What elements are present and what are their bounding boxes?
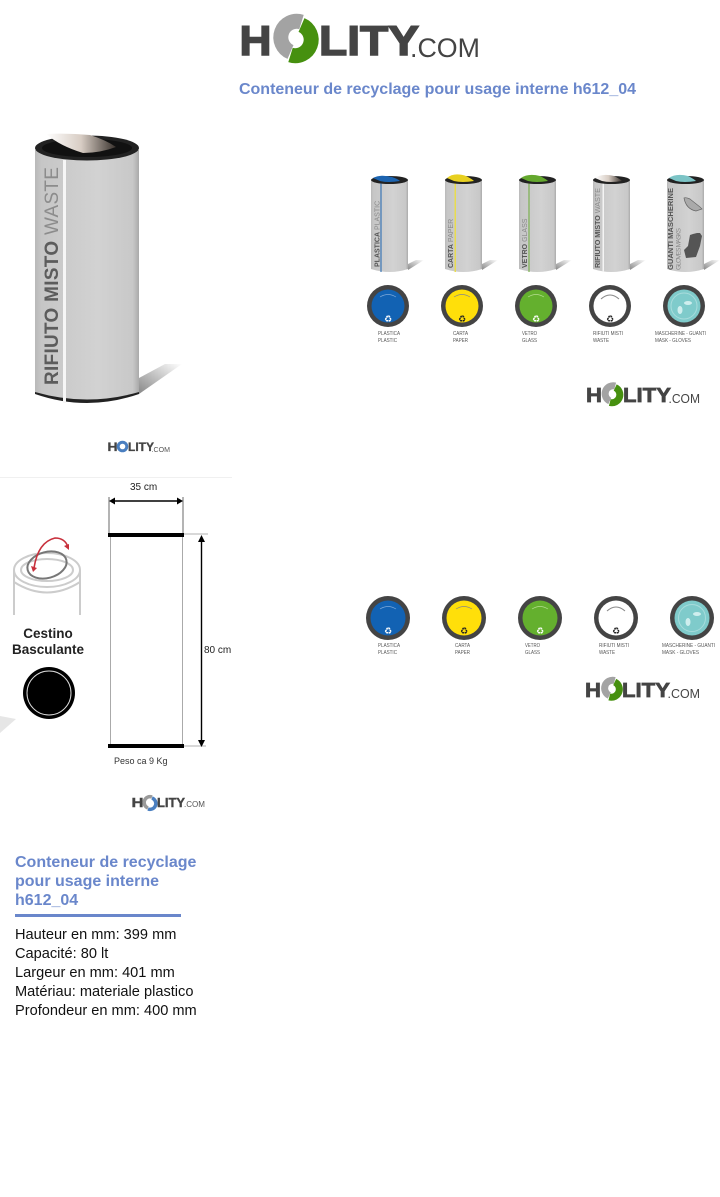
logo: right top: .COM (668, 391, 700, 406)
text block: specifications: Hauteur en mm: 399 mm (15, 927, 176, 943)
panel: five coloured bins (371, 174, 720, 272)
text block: specifications: Capacité: 80 lt (15, 946, 108, 962)
lid: mixed waste (589, 285, 631, 327)
heading: product name: Conteneur de recyclage (15, 854, 196, 871)
labels: lid row one: VETRO (522, 331, 538, 337)
bin: glass (519, 175, 572, 272)
bin: plastic: PLASTICA PLASTIC (374, 201, 382, 267)
logo: right lower: LITY (622, 680, 671, 702)
bin: mixed waste: RIFIUTO MISTO WASTE (593, 188, 602, 268)
bin label: RIFIUTO MISTO WASTE (42, 167, 63, 385)
lid: plastic (367, 285, 409, 327)
labels: lid row one: PLASTICA (378, 331, 400, 337)
labels: lid row two: VETRO (525, 643, 541, 649)
icon: gloves (684, 233, 702, 258)
note: weight: Peso ca 9 Kg (114, 756, 168, 766)
lid: paper: ♻ (460, 627, 468, 637)
labels: lid row one: PLASTIC (378, 338, 397, 344)
heading: product name: pour usage interne (15, 873, 159, 890)
labels: lid row one: MASK - GLOVES (655, 338, 691, 344)
lid: plastic (366, 596, 410, 640)
labels: lid row one: MASCHERINE - GUANTI (655, 331, 706, 337)
logo: under large bin: H (108, 442, 118, 454)
logo: under diagram: .COM (184, 799, 205, 809)
labels: lid row one: RIFIUTI MISTI (593, 331, 623, 337)
labels: lid row one (378, 331, 706, 344)
bin: mixed waste (593, 175, 646, 272)
bin: glass: VETRO GLASS (522, 218, 529, 268)
logo: right lower: .COM (668, 686, 700, 701)
text block: specifications: Matériau: materiale plastico (15, 984, 193, 1000)
labels: lid row two: PLASTIC (378, 650, 397, 656)
logo: under diagram: H (132, 795, 144, 810)
logo: under large bin: LITY (128, 442, 154, 454)
logo: under diagram (132, 795, 205, 810)
bin: paper: CARTA PAPER (448, 219, 455, 268)
bin outline (108, 533, 184, 748)
logo: Holity.com header: .COM (410, 33, 480, 63)
lid: glass: ♻ (536, 627, 544, 637)
logo: right lower: H (585, 680, 601, 702)
icon: black lid (23, 667, 75, 719)
labels: lid row one: GLASS (522, 338, 537, 344)
labels: lid row two (378, 643, 715, 656)
panel: dimensions diagram (0, 477, 232, 766)
lid: glass: ♻ (532, 315, 540, 325)
text block: specifications: Profondeur en mm: 400 mm (15, 1003, 197, 1019)
caption: Cestino Basculante: Cestino (23, 626, 73, 641)
heading: product name: h612_04 (15, 892, 78, 909)
logo: Holity.com header (240, 17, 480, 64)
text block: specifications: Largeur en mm: 401 mm (15, 965, 175, 981)
bin: masks and gloves: GLOVES MASKS (676, 227, 682, 270)
labels: lid row two: PLASTICA (378, 643, 400, 649)
lid: glass (515, 285, 557, 327)
labels: lid row two: PAPER (455, 650, 470, 656)
labels: lid row two: GLASS (525, 650, 540, 656)
logo: Holity.com header: LITY (319, 17, 419, 64)
labels: lid row two: WASTE (599, 650, 615, 656)
logo: under large bin (108, 442, 170, 454)
title: Conteneur de recyclage pour usage interne h612_04 (239, 81, 636, 98)
dimension: 35 cm (109, 482, 183, 533)
logo: right top (586, 385, 700, 407)
logo: under diagram: LITY (157, 795, 185, 810)
logo: Holity.com header: H (240, 17, 272, 64)
icon: tilting lid (14, 538, 80, 615)
labels: lid row one: WASTE (593, 338, 609, 344)
panel: lid colour row two (366, 596, 714, 640)
dimension: 35 cm: 35 cm (130, 482, 157, 493)
labels: lid row two: RIFIUTI MISTI (599, 643, 629, 649)
lid: plastic: ♻ (384, 315, 392, 325)
lid: masks and gloves (670, 596, 714, 640)
lid: paper (442, 596, 486, 640)
lid: plastic: ♻ (384, 627, 392, 637)
bin: masks and gloves (666, 175, 720, 272)
logo: right top: H (586, 385, 602, 407)
labels: lid row one: PAPER (453, 338, 468, 344)
caption: Cestino Basculante: Basculante (12, 642, 85, 657)
lid: glass (518, 596, 562, 640)
bin: plastic (371, 176, 424, 272)
icon: face mask (684, 198, 702, 211)
lid: mixed waste (594, 596, 638, 640)
lid: masks and gloves (663, 285, 705, 327)
labels: lid row two: CARTA (455, 643, 470, 649)
lid: mixed waste: ♻ (606, 315, 614, 325)
dimension: 80 cm: 80 cm (204, 645, 231, 656)
bin: paper (445, 174, 498, 272)
labels: lid row two: MASK - GLOVES (662, 650, 699, 656)
panel: lid colour row one (367, 285, 705, 327)
product photo: large mixed-waste bin (35, 134, 182, 403)
heading underline (15, 914, 181, 917)
logo: right lower (585, 680, 700, 702)
dimension: 80 cm (184, 534, 231, 747)
lid: paper: ♻ (458, 315, 466, 325)
bin: masks and gloves: GUANTI MASCHERINE (666, 188, 675, 270)
logo: right top: LITY (623, 385, 672, 407)
logo: under large bin: .COM (152, 445, 170, 454)
lid: mixed waste: ♻ (612, 627, 620, 637)
lid: paper (441, 285, 483, 327)
labels: lid row one: CARTA (453, 331, 468, 337)
